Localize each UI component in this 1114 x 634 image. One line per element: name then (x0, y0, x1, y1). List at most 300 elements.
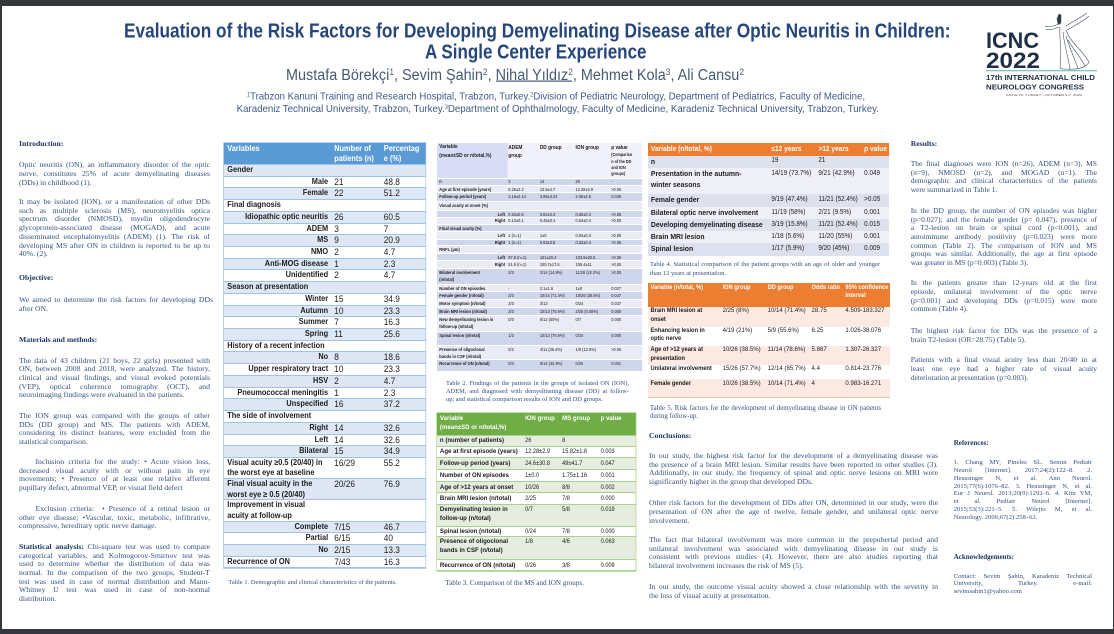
table 3 body rows: 0.002 (601, 484, 615, 491)
logo wordmark: 2022 (986, 48, 1040, 73)
text: results paragraph 2: autoimmune antibody positivity (p=0.023) were more (911, 232, 1097, 241)
text: results paragraph 2 (910, 206, 1097, 267)
table 2 body rows: >0.05 (612, 255, 622, 260)
text: introduction paragraph 2: It may be isolated (ION), or a manifestation of other DDs (19, 197, 210, 206)
table 1 body rows: Spring (304, 329, 328, 338)
table 2 body rows: - (612, 179, 613, 184)
table 1 body rows: 16/29 (334, 458, 354, 468)
table 1 body rows: Bilateral (299, 446, 328, 455)
text: statistical analysis: normal. In the comparison of the two groups, Student-T (19, 568, 210, 577)
table 1 body rows: MS (317, 235, 328, 244)
table 2 body rows: bands in CSF (n/total) (440, 354, 481, 359)
text: objective: We aimed to determine the risk factors for developing DDs (19, 294, 213, 304)
table 1 body rows: acuity at follow-up (227, 511, 291, 520)
table 2 body rows: 4/11 (36.4%) (540, 347, 563, 352)
table 1 body rows: No (318, 545, 328, 554)
table 1 body rows: Visual acuity ≥0.5 (20/40) in (227, 458, 322, 467)
text: references list: 1. Chang MY, Pineles SL. Semin Pediatr (954, 459, 1092, 466)
caption: table 5: during follow-up. (650, 413, 698, 420)
authors: , Sevim Şahin (394, 67, 483, 84)
table 4: comparison by age group (648, 143, 890, 256)
caption: table 1: Table 1. Demographic and clinical characteristics of the patients. (228, 579, 397, 586)
text: objective: after ON. (19, 304, 48, 312)
table 4 body rows: 14/19 (73.7%) (771, 170, 811, 177)
table 4 body rows: winter seasons (651, 180, 700, 189)
table 2 body rows: 51.6 (n=1) (509, 262, 527, 267)
text: results paragraph 2: common (Table 2). The comparison of ION and MS (911, 241, 1097, 250)
table 5 body rows: Unilateral involvement (650, 365, 711, 372)
table 2 body rows: 2/3 (509, 270, 514, 275)
text: statistical analysis: distribution. (19, 594, 56, 603)
table 5 body rows: 4 (811, 380, 814, 387)
table 2 header row (437, 143, 642, 179)
table 3 body rows: Follow-up period (years) (440, 460, 510, 467)
title: Evaluation of the Risk Factors for Developing Demyelinating Disease after Optic Neuritis in Children: (124, 20, 950, 42)
text: methods paragraph 2 (19, 411, 210, 446)
table 5 body rows: 4.509-183.327 (845, 307, 884, 314)
table 1 body rows: 2.3 (383, 259, 395, 269)
text: inclusion criteria: pupillary defect, abnormal VEP, or visual field defect (19, 483, 183, 492)
text: introduction paragraph 1 (19, 160, 210, 187)
table 3 body rows: 0.000 (601, 495, 615, 502)
table 1 body rows: 55.2 (383, 458, 399, 468)
table 1 body rows: 16.3 (383, 557, 399, 567)
table 4 body rows: 11/20 (55%) (818, 233, 852, 240)
text: statistical analysis (19, 542, 210, 603)
table 1 body rows: Summer (298, 317, 328, 326)
text: conclusions paragraph 1 (649, 451, 938, 486)
table 2 body rows: 0/2 (509, 347, 514, 352)
table 1 body rows: 11 (334, 329, 342, 339)
text: references list: 2015;53(3):221–5. 5. Wilejto M, et al. (954, 506, 1092, 513)
table 3 body rows: 1/8 (525, 538, 533, 545)
table 1 body rows: 15 (334, 294, 343, 304)
table 1 body rows: Gender (227, 165, 253, 174)
text: statistical analysis: categorical variables, and Kolmogorov-Smirnov test was (19, 551, 210, 560)
table 4 body rows: 0.015 (864, 221, 880, 228)
table 4 body rows: Brain MRI lesion (651, 232, 704, 241)
table 2 body rows: 3/3 (509, 309, 514, 314)
table 4 body rows: 9/20 (45%) (818, 245, 849, 252)
table 1 body rows: 23.3 (383, 364, 399, 374)
table 4 body rows: 1/17 (5.9%) (771, 245, 804, 252)
table 5 body rows: Female gender (650, 380, 691, 387)
table 2 header row: ION group (576, 145, 599, 151)
table 5 body rows: Brain MRI lesion at (650, 307, 702, 314)
table 1 header row (224, 143, 425, 165)
table 1 body rows: 23.3 (383, 306, 399, 316)
table 2 body rows: Number of ON episodes (440, 286, 486, 291)
table 4 body rows: 11/21 (52.4%) (818, 221, 857, 228)
table 4 body rows: Bilateral optic nerve involvement (651, 208, 758, 217)
table 1 body rows: 21 (334, 177, 343, 187)
table 1 body rows: 10 (334, 306, 343, 316)
text: references list (954, 459, 1092, 521)
table 1 body rows: 46.7 (383, 522, 399, 532)
table 5 body rows: 10/26 (38.5%) (722, 346, 760, 353)
table 4 body rows: 3/19 (15.8%) (771, 221, 807, 228)
table 1 body rows: 16 (334, 399, 343, 409)
table 4 body rows: Female gender (651, 195, 699, 204)
table 1 body rows: 25.6 (383, 329, 399, 339)
table 5: risk factors (648, 283, 889, 397)
table 2 body rows: 0.047 (612, 293, 621, 298)
table 2 body rows: Right (495, 218, 505, 223)
heading: objective: Objective: (19, 273, 53, 282)
table 5 body rows: 0.983-16.271 (845, 380, 881, 387)
table 3 body rows: follow-up (n/total) (440, 515, 491, 522)
table 5 body rows: 11/14 (78.6%) (767, 346, 805, 353)
table 5 header row: Variable (n/total, %) (650, 284, 702, 291)
table 1 body rows: 32.6 (383, 435, 399, 445)
table 3 body rows: 0.000 (601, 528, 615, 535)
table 2 header row: and ION (612, 165, 626, 170)
text: results paragraph 1: demographic and clinical characteristics of the patients (911, 176, 1097, 185)
table 1 body rows: worst eye ≥ 0.5 (20/40) (227, 490, 304, 499)
table 2 body rows: 6.25±2.2 (509, 187, 524, 192)
table 3 body rows: Age of >12 years at onset (440, 484, 513, 491)
table 1 body rows: No (318, 352, 328, 361)
table 2 body rows: 2/25 (0.08%) (576, 309, 598, 314)
table 2 body rows: 0.000 (612, 333, 621, 338)
caption: table 5 (650, 404, 881, 420)
table 1 body rows: History of a recent infection (227, 341, 324, 350)
table 1 body rows: HSV (313, 376, 328, 385)
table 1 body rows: 40 (383, 533, 393, 543)
table 2 body rows: 101±20.4 (540, 255, 557, 260)
table 3 body rows: 8 (562, 437, 565, 444)
text: exclusion criteria: compressive, hereditary optic nerve damage. (19, 521, 156, 530)
table 4 body rows: 9/21 (42.9%) (818, 170, 854, 177)
table 3 body rows: 0.063 (601, 538, 615, 545)
table 3 body rows: bands in CSF (n/total) (440, 547, 503, 554)
table 4 body rows: 0.001 (864, 233, 880, 240)
table 2 body rows: 1/8 (12.5%) (576, 347, 596, 352)
table 4 body rows (648, 156, 889, 256)
table 2 header row: p value (612, 145, 628, 151)
table 2 body rows: Motor symptom (n/total) (440, 301, 486, 306)
table 3 header row (437, 413, 636, 436)
table 2 body rows: 12.28±2.9 (576, 187, 593, 192)
table 2 body rows: Left (498, 255, 505, 260)
text: introduction paragraph 2: spectrum disorder (NMOSD), myelin oligodendrocyte (19, 214, 210, 223)
table 2 body rows: 0/26 (576, 361, 584, 366)
table 1 body rows: 2 (334, 376, 338, 386)
text: contact: sevimsahin1@yahoo.com (954, 588, 1022, 595)
table 3 body rows: 0/24 (525, 528, 536, 535)
table 3 body rows: 2/25 (525, 495, 536, 502)
table 4 header row: >12 years (818, 144, 848, 153)
table 2 body rows: 1/3 (509, 333, 514, 338)
table 1 body rows: 18.6 (383, 352, 399, 362)
table 5 header row: DD group (767, 284, 793, 291)
text: introduction paragraph 1: (DDs) in childhood (1). (19, 178, 92, 187)
text: inclusion criteria: movements; • Presence of at least one relative afferent (19, 474, 210, 483)
table 1 body rows: 7/43 (334, 557, 350, 567)
table 3 body rows: Presence of oligoclonal (440, 538, 508, 545)
table 1 body rows: 2.3 (383, 388, 395, 398)
table 2: findings in ION, ADEM and DD groups (437, 143, 642, 372)
text: contact (954, 573, 1092, 595)
table 2 body rows: >0.05 (612, 212, 622, 217)
table 1 body rows: 7 (383, 224, 388, 234)
table 2 body rows: 0.63±0.5 (540, 240, 556, 245)
table 5 body rows: 10/26 (38.5%) (722, 380, 760, 387)
text: results paragraph 1 (910, 159, 1097, 194)
text: conclusions paragraph 2: involvement. (649, 516, 689, 525)
text: methods paragraph 1: neuroimaging findings were evaluated in the patients. (19, 390, 184, 399)
text: contact: University, Turkey. e-mail: (954, 580, 1092, 587)
table 5 header row: interval (845, 292, 865, 299)
table 2 body rows: New demyelinating lesion in (440, 317, 494, 322)
table 1 body rows: Upper respiratory tract (248, 364, 328, 373)
table 2 body rows: 0.027 (612, 286, 621, 291)
table 2 body rows: 0.48±0.4 (540, 218, 556, 223)
authors: , Ali Cansu (670, 67, 739, 84)
text: results paragraph 1: were summarized in Table 1. (911, 185, 997, 194)
table 1 body rows: Right (309, 423, 328, 432)
text: introduction paragraph 2 (19, 197, 210, 258)
caption: table 2: up; and statistical comparison results of ION and DD groups. (446, 396, 603, 403)
text: exclusion criteria (19, 504, 210, 530)
table 1 body rows: 15 (334, 446, 343, 456)
text: inclusion criteria: Inclusion criteria for the study: • Acute vision loss, (36, 457, 210, 466)
authors: Mustafa Börekçi (286, 67, 397, 84)
table 2 body rows: 14 (540, 179, 545, 184)
table 1: demographic and clinical characteristics (224, 143, 425, 568)
table 1 body rows: the worst eye at baseline (227, 468, 314, 477)
table 3 body rows: 0.019 (601, 506, 615, 513)
authors: 2 (483, 67, 488, 77)
table 1 header row: Percentag (383, 144, 419, 153)
table 5 body rows: Enhancing lesion in (650, 327, 704, 334)
caption: table 4 (650, 261, 880, 277)
table 1 header row: patients (n) (334, 154, 373, 163)
authors: 2 (739, 67, 744, 77)
table 2 body rows: Bilateral involvement (440, 270, 480, 275)
text: introduction paragraph 2: 40%. (2). (19, 249, 48, 258)
heading: results: Results: (911, 139, 937, 148)
table 1 body rows: Winter (305, 294, 328, 303)
table 1 body rows: Left (314, 435, 328, 444)
caption: table 2: Table 2. Findings of the patients in the groups of isolated ON (ION), (446, 380, 629, 387)
table 2 body rows: 11/26 (42.3%) (576, 270, 600, 275)
table 1 body rows: Female (302, 188, 328, 197)
text: results paragraph 2: groups was similar. Additionally, the age at first episode (911, 249, 1097, 258)
table 4 header row (648, 143, 889, 156)
table 2 header row: (Compariso (612, 152, 632, 157)
table 2 header row: Variable (440, 144, 458, 150)
table 3 header row: p value (601, 415, 622, 422)
table 5 body rows (648, 307, 890, 397)
heading: references: References: (954, 439, 989, 447)
text: inclusion criteria (19, 457, 210, 492)
table 1 body rows: 6/15 (334, 533, 350, 543)
table 1 body rows: 20/26 (334, 479, 354, 489)
affiliations (237, 92, 879, 115)
table 2 body rows: 10/13 (76.9%) (540, 333, 565, 338)
table 2 body rows: >0.05 (612, 270, 622, 275)
table 2 header row: ADEM (509, 145, 523, 151)
text: introduction paragraph 1: nerve, constitutes 25% of acute demyelinating diseases (19, 169, 210, 178)
table 5 body rows: 2/25 (8%) (722, 307, 748, 314)
table 2 body rows: 97.8 (n=1) (509, 255, 527, 260)
text: results paragraph 5 (910, 355, 1097, 382)
table 2 body rows: 1 (n=1) (509, 240, 521, 245)
text: introduction paragraph 2: disseminated encephalomyelitis (ADEM) (1). The risk of (19, 232, 210, 241)
title: A Single Center Experience (425, 42, 646, 64)
table 1 body rows: Autumn (300, 306, 328, 315)
text: references list: Neurol [Internet]. 2017;24(2):122–8. 2. (954, 467, 1092, 474)
table 1 body rows: 76.9 (383, 479, 399, 489)
affiliations: Karadeniz Technical University, Trabzon, Turkey. (237, 104, 460, 115)
text: methods paragraph 1: (VEP), optical coherence tomography (OCT), and (19, 382, 210, 391)
text: references list: et al. Pediatr Neurol [Internet]. (954, 498, 1092, 505)
text: introduction paragraph 2: such as multiple sclerosis (MS), neuromyelitis optica (19, 206, 210, 215)
table 2 body rows: 0.049 (612, 194, 621, 199)
table 1 body rows: 13.3 (383, 545, 399, 555)
heading: introduction: Introduction: (19, 139, 63, 148)
table 1 body rows: Pneumococcal meningitis (237, 388, 328, 397)
table 1 body rows: 3 (334, 224, 338, 234)
table 1 body rows: Unidentified (285, 270, 328, 279)
logo wordmark: ICNC (986, 28, 1039, 53)
table 2 body rows: 1±0 (540, 233, 547, 238)
text: statistical analysis: used to determine whether the distribution of data was (19, 559, 210, 568)
table 1 body rows: Partial (305, 533, 328, 542)
text: references list: 2015;77(6):1076–82. 3. Heussinger N, et al. (954, 483, 1092, 490)
table 5 body rows: 5.867 (811, 346, 826, 353)
text: references list: Neurology. 2006;67(2):258–62. (954, 514, 1037, 521)
text: methods paragraph 2: statistical comparison. (19, 437, 88, 446)
heading: materials and methods: Materials and methods: (19, 335, 97, 344)
text: methods paragraph 2: considering its distinct features, were excluded from the (19, 428, 210, 437)
text: results paragraph 2: In the DD group, the number of ON episodes was higher (911, 206, 1097, 215)
table 1 body rows: 1 (334, 388, 338, 398)
congress name (986, 75, 1095, 97)
table 2 body rows: Presence of oligoclonal (440, 347, 485, 352)
table 1 body rows: 20.9 (383, 235, 399, 245)
table 2 body rows: 103.9±20.5 (576, 255, 596, 260)
table 4 body rows: 11/19 (58%) (771, 209, 805, 216)
table 1 body rows: Final diagnosis (227, 200, 280, 209)
table 3 body rows: n (number of patients) (440, 437, 504, 444)
table 3 body rows: 0.003 (601, 448, 615, 455)
text: results paragraph 2: (p=0.027); and the female gender (p= 0.047), presence of (911, 215, 1097, 224)
table 5 body rows: Age of >12 years at (650, 346, 703, 353)
table 2 header row: DD group (540, 145, 562, 151)
table 2 body rows: 2.1±1.6 (540, 286, 553, 291)
table 1 body rows: 2/15 (334, 545, 350, 555)
table 2 body rows: 2/3 (509, 293, 514, 298)
text: conclusions paragraph 4: the loss of visual acuity at presentation. (649, 590, 770, 600)
table 3 body rows: 8/8 (562, 484, 570, 491)
affiliations: Trabzon Kanuni Training and Research Hospital, Trabzon, Turkey. (250, 92, 530, 103)
table 1 body rows: 7/15 (334, 522, 350, 532)
table 2 body rows: RNFL (µm) (440, 247, 460, 252)
text: references list: Eur J Neurol. 2013;20(9):1292–6. 4. Kim YM, (954, 490, 1092, 497)
table 2 body rows: 1±0 (576, 286, 582, 291)
table 1 body rows: Recurrence of ON (227, 557, 289, 566)
table 4 body rows: 9/19 (47.4%) (771, 196, 807, 203)
table 5 body rows: 1.307-26.327 (845, 346, 881, 353)
table 2 body rows: 106.4±11 (576, 262, 592, 267)
caption: table 2: ADEM, and diagnosed with demyelinating disease (DD) at follow- (446, 388, 629, 395)
table 4 body rows: 1/18 (5.6%) (771, 233, 804, 240)
table 1 body rows: Idiopathic optic neuritis (245, 212, 328, 221)
table 1 body rows: 16.3 (383, 317, 399, 327)
table 4 body rows: 2/21 (9.5%) (818, 209, 851, 216)
table 1 body rows: Anti-MOG disease (264, 259, 328, 268)
table 1 body rows: 37.2 (383, 399, 399, 409)
table 1 body rows: 60.5 (383, 212, 399, 222)
authors: , Mehmet Kola (573, 67, 666, 84)
table 1 header row: Number of (334, 144, 371, 153)
text: contact: Contact: Sevim Şahin, Karadeniz Technical (954, 573, 1092, 580)
table 2 body rows: 3 (509, 179, 511, 184)
text: methods paragraph 2: The ION group was compared with the groups of other (19, 411, 210, 420)
table 3 body rows: 49±41.7 (562, 460, 582, 467)
table 2 body rows: Final visual acuity (%) (440, 226, 482, 231)
authors: 2 (568, 67, 573, 77)
authors: 3 (666, 67, 670, 77)
table 2 body rows: 0.62±0.4 (576, 240, 591, 245)
text: conclusions paragraph 3: unilateral involvement was associated with demyelinating disease in our study is (649, 544, 938, 553)
table 1 body rows: 14 (334, 423, 343, 433)
table 3 body rows: 1±0.0 (525, 472, 539, 479)
table 3 body rows: 5/8 (562, 506, 570, 513)
table 2 body rows: follow-up (n/total) (440, 324, 473, 329)
text: exclusion criteria: other eye disease; •Vascular, toxic, metabolic, infiltrative, (19, 513, 210, 522)
table 2 body rows: 3.16±2.14 (509, 194, 526, 199)
text: conclusions paragraph 1: Additionally, in our study, the frequency of spinal and optic nerve lesions on MRI were (649, 468, 938, 477)
table 2 body rows: 0.000 (612, 309, 621, 314)
text: conclusions paragraph 1: the presence of a brain MRI lesion. Similar results have been reported in other studies (3). (649, 460, 938, 469)
table 1 body rows: 4.7 (383, 270, 395, 280)
table 2 body rows: 2/3 (509, 301, 514, 306)
table 2 body rows: 0.84±0.3 (576, 233, 591, 238)
table 2 body rows: 0.001 (612, 361, 621, 366)
table 2 body rows: Recurrence of ON (n/total) (440, 361, 490, 366)
table 5 body rows: 5/9 (55.6%) (767, 327, 798, 334)
table 1 body rows: Season at presentation (227, 282, 308, 291)
text: results paragraph 3: In the patients greater than 12-years old at the first (911, 278, 1097, 287)
table 2 body rows: 0/24 (576, 333, 584, 338)
table 5 body rows: 10/14 (71.4%) (767, 307, 805, 314)
text: introduction paragraph 1: Optic neuritis (ON), an inflammatory disorder of the optic (19, 160, 210, 169)
table 2 body rows: 2/14 (14.8%) (540, 270, 563, 275)
text: results paragraph 1: The final diagnoses were ION (n=26), ADEM (n=3), MS (911, 159, 1097, 168)
table 2 body rows: 0.13±0.1 (509, 218, 524, 223)
table 2 body rows: >0.05 (612, 218, 622, 223)
text: results paragraph 4: brain T2-lesion (OR=28.75) (Table 5). (911, 335, 1026, 344)
table 2 body rows: 10/26 (38.5%) (576, 293, 601, 298)
table 3 body rows: 0/7 (525, 506, 533, 513)
table 2 body rows: >0.05 (612, 240, 622, 245)
icon: whirling dervish (1045, 13, 1089, 69)
table 3 header row: (mean±SD or n/total,%) (440, 424, 506, 431)
table 2 body rows: 0.64±0.4 (576, 218, 591, 223)
text: conclusions paragraph 4: In our study, the outcome visual acuity showed a close relationship with the severity in (649, 582, 938, 591)
table 1 body rows: The side of involvement (227, 411, 311, 420)
table 1 body rows: Male (311, 177, 328, 186)
text: conclusions paragraph 3: The fact that bilateral involvement was more common in the prepubertal period and (649, 535, 938, 544)
table 3 body rows: 7/8 (562, 528, 570, 535)
table 3 body rows: 3/8 (562, 562, 570, 569)
text: references list: Heussinger N, et al. Ann Neurol. (954, 475, 1092, 482)
table 3 body rows: 26 (525, 437, 531, 444)
table 2 body rows: >0.05 (612, 347, 622, 352)
